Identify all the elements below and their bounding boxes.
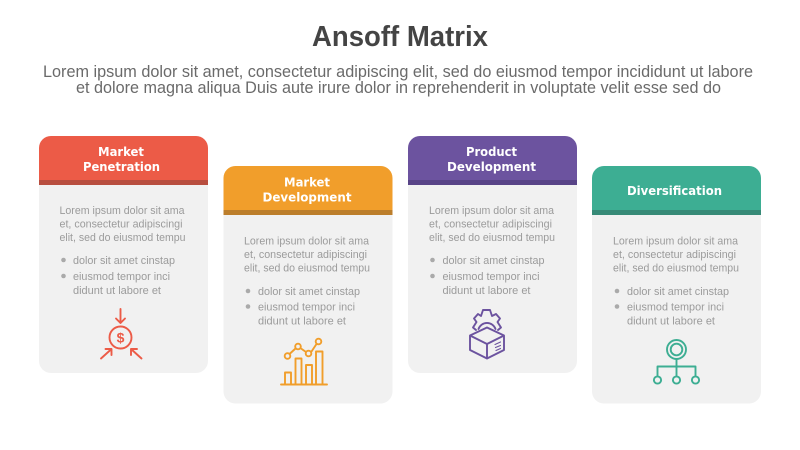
text: diversification: didunt ut labore et bbox=[627, 316, 715, 328]
text: product development: didunt ut labore et bbox=[442, 285, 530, 297]
text: product development: dolor sit amet cinstap bbox=[442, 255, 544, 267]
text: market development: eiusmod tempor inci bbox=[258, 302, 355, 314]
header: diversification bbox=[592, 166, 761, 215]
header: market penetration bbox=[39, 136, 208, 185]
text: diversification: et, consectetur adipiscingi bbox=[613, 249, 736, 261]
text: product development: Lorem ipsum dolor sit ama bbox=[429, 205, 555, 217]
text: market penetration bbox=[60, 205, 186, 297]
header: market penetration: Penetration bbox=[83, 160, 160, 174]
header: product development bbox=[408, 136, 577, 185]
text: market penetration: dolor sit amet cinstap bbox=[73, 255, 175, 267]
text: market development: elit, sed do eiusmod tempu bbox=[244, 262, 370, 274]
icon: money with inward arrows bbox=[101, 309, 142, 358]
text: market penetration: didunt ut labore et bbox=[73, 285, 161, 297]
panel: product development bbox=[408, 136, 577, 373]
panel: market development bbox=[224, 166, 393, 404]
text: market development: et, consectetur adipiscingi bbox=[244, 249, 367, 261]
icon: money with inward arrows: $ bbox=[117, 330, 125, 346]
subtitle: et dolore magna aliqua Duis aute irure dolor in reprehenderit in voluptate velit esse sed do bbox=[76, 79, 721, 97]
icon: box with gear bbox=[470, 310, 504, 358]
header: diversification: Diversification bbox=[627, 184, 722, 198]
icon: growth bar chart bbox=[281, 339, 327, 384]
text: market development: didunt ut labore et bbox=[258, 316, 346, 328]
text: market development: Lorem ipsum dolor sit ama bbox=[244, 236, 370, 248]
icon: hierarchy bbox=[654, 340, 699, 384]
text: market penetration: elit, sed do eiusmod tempu bbox=[60, 232, 186, 244]
text: product development: et, consectetur adipiscingi bbox=[429, 218, 552, 230]
text: product development: elit, sed do eiusmod tempu bbox=[429, 232, 555, 244]
header: market penetration: Market bbox=[98, 145, 144, 159]
subtitle: Lorem ipsum dolor sit amet, consectetur adipiscing elit, sed do eiusmod tempor incididunt ut labore bbox=[43, 63, 753, 81]
text: product development: eiusmod tempor inci bbox=[442, 271, 540, 283]
text: diversification: elit, sed do eiusmod tempu bbox=[613, 262, 739, 274]
text: product development bbox=[429, 205, 555, 297]
panel: diversification bbox=[592, 166, 761, 404]
text: market development: dolor sit amet cinstap bbox=[258, 286, 360, 298]
text: market penetration: Lorem ipsum dolor sit ama bbox=[60, 205, 185, 217]
header: product development: Product bbox=[466, 145, 517, 159]
text: diversification: Lorem ipsum dolor sit ama bbox=[613, 236, 739, 248]
title: Ansoff Matrix bbox=[312, 21, 488, 53]
panel: market penetration bbox=[39, 136, 208, 373]
text: diversification bbox=[613, 236, 739, 328]
header: market development: Development bbox=[262, 190, 352, 204]
text: market penetration: et, consectetur adipiscingi bbox=[60, 218, 182, 230]
header: market development: Market bbox=[284, 176, 330, 190]
header: market development bbox=[224, 166, 393, 215]
text: diversification: dolor sit amet cinstap bbox=[627, 286, 729, 298]
text: market penetration: eiusmod tempor inci bbox=[73, 271, 170, 283]
text: diversification: eiusmod tempor inci bbox=[627, 302, 724, 314]
subtitle bbox=[43, 63, 753, 97]
text: market development bbox=[244, 236, 370, 328]
header: product development: Development bbox=[447, 160, 536, 174]
